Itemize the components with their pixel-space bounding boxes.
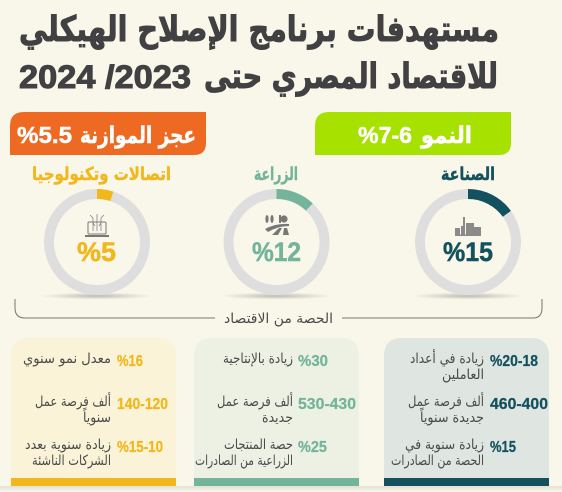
panel: industry ring (412, 164, 524, 300)
growth banner (315, 112, 511, 155)
panel: industry card: الحصة من الصادرات (391, 453, 484, 469)
panel: agriculture card: الزراعية من الصادرات (195, 453, 293, 469)
panel: industry card (384, 338, 549, 486)
panel: telecom card: ألف فرصة عمل (35, 392, 111, 410)
panel: agriculture card (194, 338, 359, 486)
panel: telecom card: الشركات الناشئة (32, 453, 111, 469)
bracket: share of the economy: الحصة من الاقتصاد (224, 311, 333, 327)
panel: telecom card: زيادة سنوية بعدد (25, 437, 111, 453)
title (19, 10, 499, 97)
panel: industry card: زيادة في أعداد (410, 349, 484, 367)
panel: telecom card (11, 338, 176, 486)
panel: telecom card: 140-120 (117, 396, 168, 413)
panel: telecom ring: اتصالات وتكنولوجيا (32, 164, 171, 185)
icon: laptop (85, 214, 109, 236)
panel: agriculture ring (220, 164, 332, 300)
icon: factory (455, 217, 481, 236)
panel: agriculture card: ألف فرصة عمل (217, 392, 293, 410)
panel: telecom ring (32, 164, 171, 300)
card shadow (0, 486, 562, 492)
panel: agriculture ring: الزراعة (254, 164, 298, 185)
panel: agriculture ring: %12 (252, 237, 301, 267)
panel: agriculture card: جديدة (262, 410, 293, 426)
panel: industry card: %15 (490, 439, 516, 456)
budget deficit banner: عجز الموازنة (80, 123, 196, 149)
panel: industry card: 460-400 (490, 396, 548, 413)
title: 2024 /2023 (19, 59, 191, 95)
panel: agriculture card: 530-430 (298, 396, 356, 413)
panel: industry card: %20-18 (490, 353, 538, 370)
panel: telecom card: سنوياً (83, 407, 111, 426)
panel: agriculture card: %30 (298, 353, 328, 370)
panel: telecom ring: %5 (77, 237, 116, 267)
panel: telecom card: %15-10 (117, 439, 163, 456)
panel: industry ring: الصناعة (441, 164, 495, 185)
panel: industry card: ألف فرصة عمل (408, 392, 484, 410)
panel: agriculture card: %25 (298, 439, 327, 456)
growth banner: %7-6 (358, 122, 412, 148)
icon: wheat field (265, 215, 289, 235)
panel: industry card: زيادة سنوية في (405, 437, 484, 453)
budget deficit banner (10, 112, 206, 155)
panel: telecom card: %16 (117, 353, 143, 370)
panel: industry card: جديدة سنوياً (419, 407, 484, 426)
budget deficit banner: %5.5 (17, 122, 72, 148)
panel: agriculture card: حصة المنتجات (224, 437, 293, 453)
growth banner: النمو (420, 123, 472, 149)
bracket: share of the economy (15, 299, 542, 327)
panel: industry ring: %15 (443, 237, 493, 267)
panel: industry card: العاملين (442, 367, 484, 383)
panel: telecom card: معدل نمو سنوي (23, 351, 111, 367)
panel: agriculture card: زيادة بالإنتاجية (223, 351, 293, 367)
